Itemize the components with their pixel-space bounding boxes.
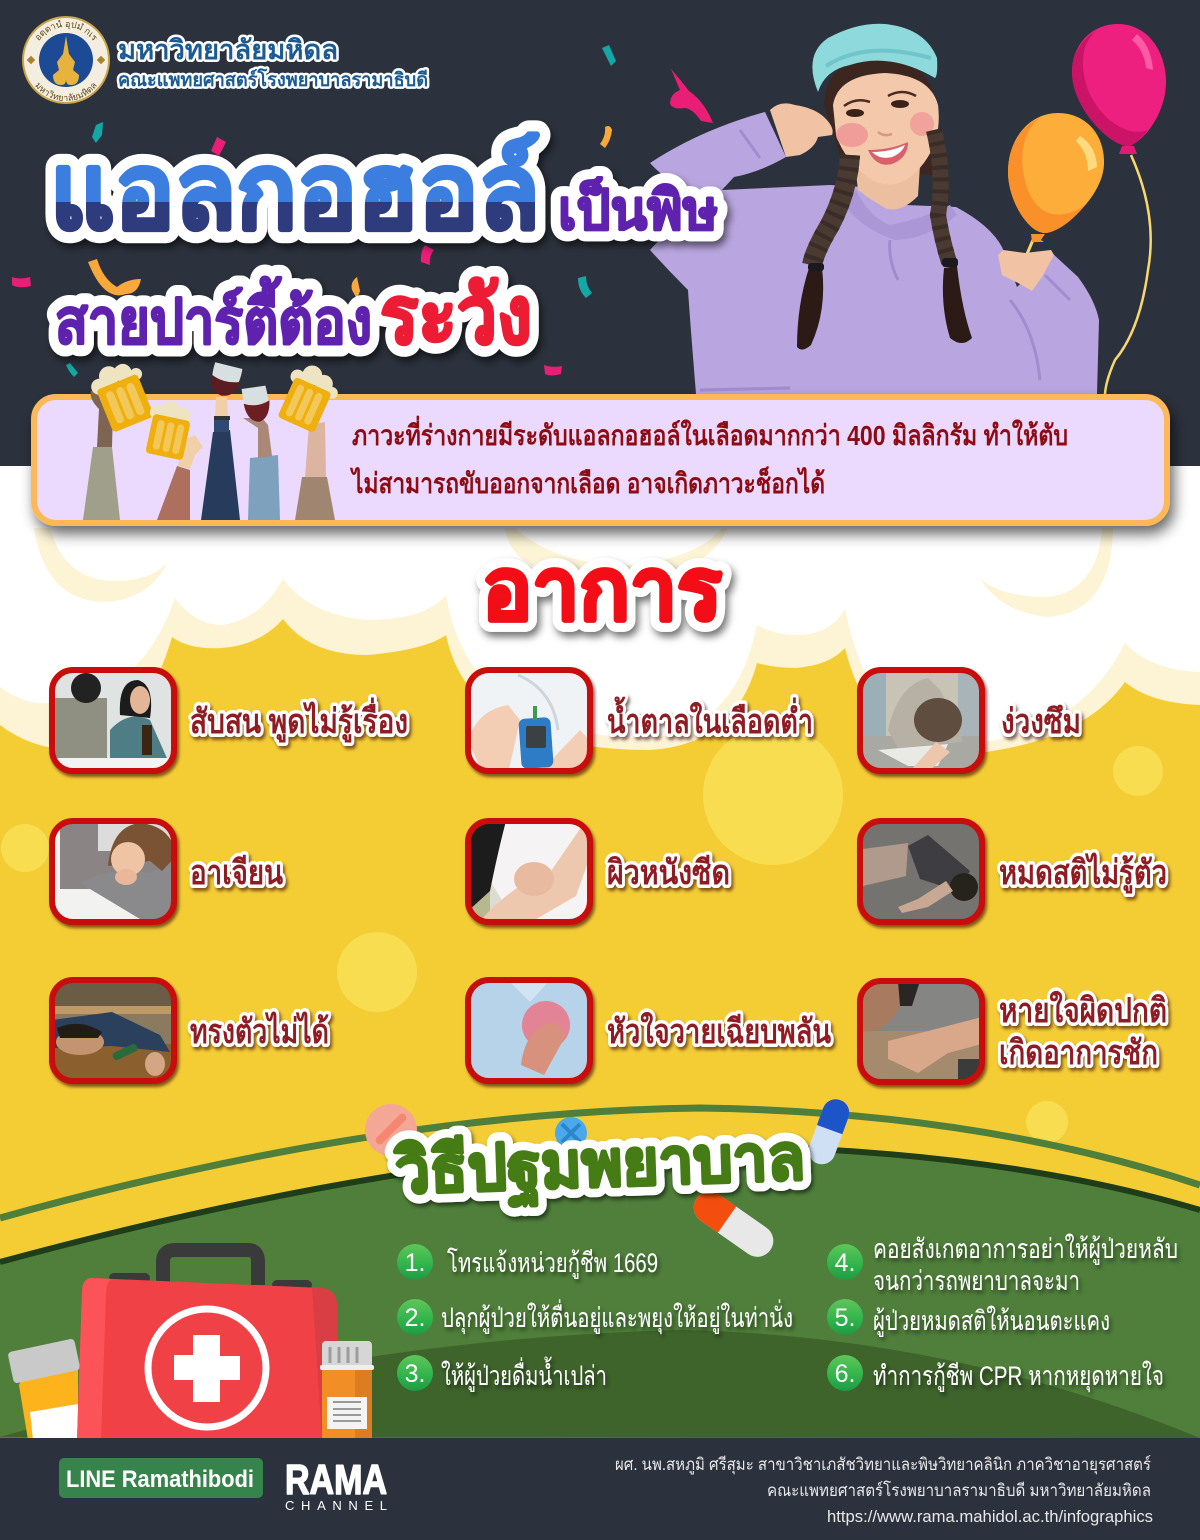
label: หายใจผิดปกติ	[999, 990, 1167, 1030]
icon: beer mug left	[86, 355, 159, 434]
university name: มหาวิทยาลัยมหิดล	[118, 35, 338, 65]
photo: man slumped on table	[52, 980, 178, 1084]
title: party-goers beware: ระวัง	[380, 271, 532, 360]
icon: red case	[77, 1250, 337, 1440]
first aid steps: right column	[827, 1233, 1178, 1393]
title: alcohol: แอลกอฮอล์	[50, 133, 540, 251]
icon: blue tablet	[555, 1117, 587, 1149]
icon: blue capsule	[805, 1095, 853, 1168]
step 3: 3.	[405, 1360, 425, 1388]
label: หัวใจวายเฉียบพลัน	[607, 1011, 831, 1051]
hoodie	[650, 112, 1099, 394]
heading: symptoms: อาการ	[482, 542, 722, 638]
confetti	[12, 45, 713, 377]
back hair	[824, 55, 938, 175]
title: party-goers beware: สายปาร์ตี้ต้อง	[55, 276, 372, 357]
credits: คณะแพทยศาสตร์โรงพยาบาลรามาธิบดี มหาวิทยาลัยมหิดล	[767, 1480, 1151, 1500]
photo: pale arm	[468, 821, 594, 925]
credits	[615, 1455, 1153, 1526]
label: น้ำตาลในเลือดต่ำ	[607, 696, 813, 741]
logo: RAMA Channel	[285, 1456, 387, 1513]
illustration: first aid kit and bottles	[7, 1250, 374, 1440]
photo: collapsed hand	[860, 981, 986, 1085]
label: ง่วงซึม	[1001, 703, 1081, 741]
text: definition: ภาวะที่ร่างกายมีระดับแอลกอฮอล์ในเลือดมากกว่า 400 มิลลิกรัม ทำให้ตับ	[352, 415, 1068, 451]
step 4: จนกว่ารถพยาบาลจะมา	[873, 1266, 1080, 1296]
university logo: อตฺตานํ อุปมํ กเร	[36, 20, 97, 40]
step 4: 4.	[835, 1249, 855, 1277]
photo: asleep at desk	[860, 670, 986, 774]
step 3	[397, 1355, 607, 1392]
step 3: ให้ผู้ป่วยดื่มน้ำเปล่า	[441, 1356, 607, 1392]
symptom 3: drowsiness	[860, 670, 1081, 774]
label: เกิดอาการชัก	[999, 1034, 1158, 1072]
step 4	[827, 1233, 1178, 1296]
logo: RAMA Channel: RAMA	[285, 1456, 387, 1503]
photo: glucose meter	[468, 670, 594, 774]
title: party-goers beware: สายปาร์ตี้ต้อง	[55, 276, 372, 357]
symptom 4: vomiting	[52, 821, 283, 925]
background: dark header	[0, 0, 1200, 466]
label	[999, 990, 1167, 1072]
label: ผิวหนังซีด	[607, 854, 730, 892]
text: definition	[350, 415, 1068, 499]
step 2: ปลุกผู้ป่วยให้ตื่นอยู่และพยุงให้อยู่ในท่านั่ง	[441, 1299, 793, 1335]
left braid	[797, 155, 850, 350]
icon: yellow bottle	[7, 1338, 81, 1440]
label: ทรงตัวไม่ได้	[190, 1011, 329, 1051]
step 5	[827, 1299, 1110, 1337]
symptom 8: sudden heart failure	[468, 980, 831, 1084]
icon: beer mug right	[273, 358, 345, 436]
title: poisoning: เป็นพิษ	[558, 177, 718, 241]
woman in purple hoodie	[650, 24, 1099, 394]
background: green hill	[0, 1108, 1200, 1440]
step 1: 1.	[405, 1249, 425, 1277]
photo: person on the ground	[860, 821, 986, 925]
university name: คณะแพทยศาสตร์โรงพยาบาลรามาธิบดี	[118, 68, 428, 91]
step 1: โทรแจ้งหน่วยกู้ชีพ 1669	[447, 1248, 658, 1279]
symptom 9: abnormal breathing, seizures	[860, 981, 1167, 1085]
university logo	[22, 16, 110, 104]
step 5: ผู้ป่วยหมดสติให้นอนตะแคง	[873, 1305, 1110, 1337]
step 6: 6.	[835, 1360, 855, 1388]
icon: wine glass right	[242, 385, 272, 424]
footer bar	[0, 1438, 1200, 1540]
title: party-goers beware: ระวัง	[380, 271, 532, 360]
heading: first aid: วิธีปฐมพยาบาล	[393, 1121, 806, 1212]
icon: salmon tablet	[365, 1104, 417, 1156]
credits: https://www.rama.mahidol.ac.th/infographics	[827, 1507, 1153, 1526]
lower hand	[998, 250, 1054, 291]
label: อาเจียน	[190, 854, 283, 892]
title: alcohol: แอลกอฮอล์	[50, 133, 540, 251]
heading: symptoms: อาการ	[482, 542, 722, 638]
text: definition: ไม่สามารถขับออกจากเลือด อาจเกิดภาวะช็อกได้	[350, 466, 825, 499]
label: สับสน พูดไม่รู้เรื่อง	[190, 697, 408, 743]
step 1	[397, 1244, 658, 1280]
title: party-goers beware	[55, 271, 532, 360]
icon: orange bottle	[320, 1341, 374, 1440]
raised hand	[770, 103, 833, 157]
photo: vomiting at sink	[52, 821, 178, 925]
icon: raised hands with drinks	[83, 355, 345, 520]
icon: orange capsule	[688, 1185, 780, 1263]
face	[833, 73, 939, 184]
icons: pills	[365, 1095, 853, 1263]
first aid steps: left column	[397, 1244, 793, 1392]
photo: chest pain	[468, 980, 594, 1084]
title: poisoning: เป็นพิษ	[558, 177, 718, 241]
step 2	[397, 1299, 793, 1335]
logo: RAMA Channel: CHANNEL	[285, 1498, 387, 1513]
neck	[855, 165, 920, 210]
badge: LINE Ramathibodi	[59, 1458, 263, 1498]
background: white cloud area and yellow body	[0, 466, 1200, 1300]
right braid	[934, 130, 972, 343]
icon: beer mug center-left	[141, 397, 194, 461]
university name	[118, 35, 428, 91]
panel: definition card	[34, 397, 1167, 523]
symptom 5: pale skin	[468, 821, 730, 925]
step 5: 5.	[835, 1304, 855, 1332]
balloons	[1008, 24, 1166, 394]
symptom 7: cannot stay upright	[52, 980, 329, 1084]
photo: two people talking	[52, 670, 178, 774]
hat	[812, 24, 937, 92]
university logo: มหาวิทยาลัยมหิดล	[35, 82, 97, 101]
badge: LINE Ramathibodi: LINE Ramathibodi	[66, 1466, 254, 1493]
step 2: 2.	[405, 1304, 425, 1332]
heading: first aid: วิธีปฐมพยาบาล	[393, 1121, 806, 1212]
symptom 6: unconscious	[860, 821, 1167, 925]
symptom 2: low blood sugar	[468, 670, 813, 774]
symptom 1: confused speech	[52, 670, 408, 774]
icon: wine glass left	[208, 362, 243, 399]
step 6	[827, 1355, 1164, 1393]
